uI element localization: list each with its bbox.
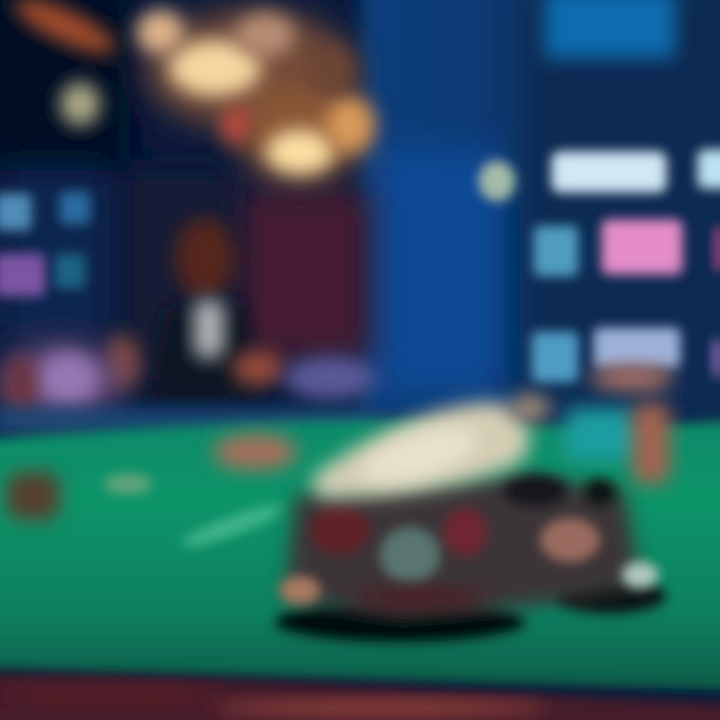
panel: top blue sign <box>545 0 675 58</box>
stacked chips at right <box>590 365 674 484</box>
back table rail with blurred seats <box>0 344 380 434</box>
dealer figure <box>104 218 284 400</box>
left wall screens <box>0 192 90 296</box>
table: green felt <box>0 420 720 690</box>
chips on felt <box>6 434 297 553</box>
chandelier lights <box>8 0 374 180</box>
table edge: bottom rail <box>0 674 720 720</box>
right wall screens <box>479 150 720 382</box>
chips and cards pile <box>275 394 666 642</box>
table highlight: teal reflection <box>565 408 637 460</box>
